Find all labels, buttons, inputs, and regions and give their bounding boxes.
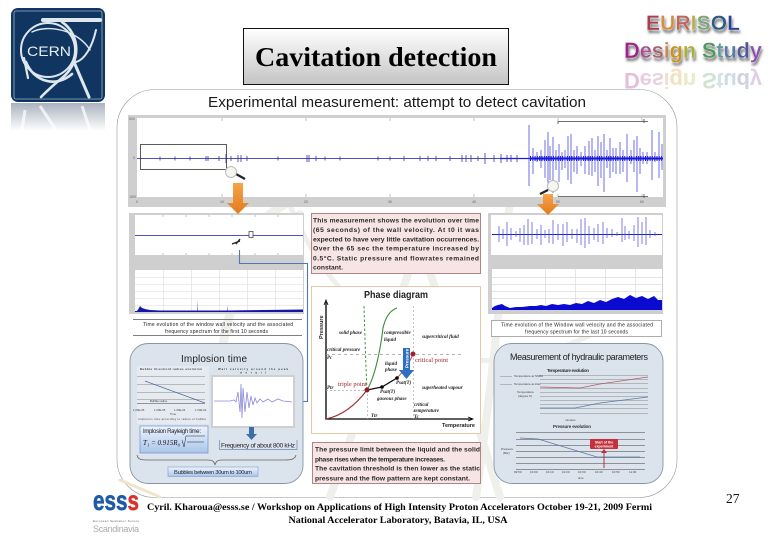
text box: measurement description: expected to have very little cavitation occurrences. [313, 236, 479, 244]
temperature chart: (degree K) [518, 394, 532, 398]
hydraulic heading: Measurement of hydraulic parameters [510, 352, 648, 362]
phase diagram curves [324, 300, 473, 421]
chart: full 65 second wall velocity: 20 [304, 200, 308, 204]
phase diagram labels: Ptr [327, 386, 333, 391]
footer citation: Cyril. Kharoua@esss.se / Workshop on Applications of High Intensity Proton Accelerators October 19-21, 2009 Fermi [147, 502, 652, 513]
implosion pressure chart: Bubble radius [150, 399, 168, 403]
Rayleigh formula box [140, 426, 208, 453]
chart: full 65 second wall velocity: 30 [388, 200, 392, 204]
slide heading: Experimental measurement: attempt to detect cavitation [208, 95, 586, 111]
brace [137, 455, 296, 465]
pressure chart: Pressure evolution [553, 424, 591, 429]
EURISOL Design Study logo: Design Study [624, 68, 763, 93]
implosion waveform: Wall velocity around the peak [218, 367, 288, 371]
phase diagram labels: phase [384, 368, 398, 373]
phase diagram labels: critical point [415, 357, 448, 364]
pressure chart: 10:30 [578, 470, 586, 474]
phase diagram labels: triple point [338, 381, 367, 388]
phase diagram labels: liquid [385, 362, 397, 367]
phase diagram labels [319, 315, 475, 429]
title [244, 28, 508, 84]
chart: full 65 second wall velocity: 500 [129, 117, 135, 121]
panel: implosion time [130, 344, 303, 484]
text box: measurement description: constant. [313, 264, 343, 272]
chart: full 65 second wall velocity [128, 115, 666, 207]
pressure drop arrow: Pressure drop [404, 337, 410, 368]
phase diagram labels: Ttr [371, 414, 377, 419]
phase diagram labels: gaseous phase [376, 397, 407, 402]
text box: pressure limit [312, 442, 480, 484]
implosion pressure chart: 1.00E-05 [133, 408, 145, 412]
chart: full 65 second wall velocity: 50 [556, 200, 560, 204]
temperature chart: Temperature [517, 390, 534, 394]
bubble size label [168, 467, 258, 476]
phase diagram labels: critical [414, 403, 429, 408]
implosion pressure chart: 1.00E-05 [154, 408, 166, 412]
chart: first 10 seconds [129, 213, 304, 314]
panel: phase diagram [312, 286, 480, 434]
caption: first 10 seconds [133, 320, 302, 336]
phase diagram labels: critical pressure [327, 348, 361, 353]
experiment start marker: experiment [595, 444, 614, 448]
implosion pressure chart: 1.00E-04 [174, 408, 186, 412]
pressure chart: Pressure [501, 447, 513, 451]
EURISOL Design Study logo: Design Study [625, 41, 764, 66]
experiment start marker [590, 439, 618, 468]
ESS logo: esss [93, 485, 139, 516]
footer citation [147, 502, 652, 526]
text box: measurement description: This measurement shows the evolution over time [313, 218, 479, 224]
ESS logo: European Spallation Source [93, 519, 139, 523]
phase diagram labels: Psat(T) [380, 390, 396, 395]
implosion pressure chart: Implosion time according to radius of bubble [138, 417, 206, 421]
phase diagram labels: superheated vapour [421, 386, 463, 391]
temperature chart: Temperature at SSBA [514, 374, 543, 378]
arrow: frequency [246, 427, 257, 440]
EURISOL Design Study logo [624, 12, 764, 93]
text box: measurement description [312, 214, 480, 274]
EURISOL Design Study logo: EURISOL [646, 12, 740, 35]
EURISOL Design Study logo: EURISOL [647, 15, 741, 38]
pressure chart: time [578, 476, 584, 480]
text box: pressure limit: phase rises when the temperature increases. [315, 456, 445, 464]
chart: full 65 second wall velocity: 10 [220, 200, 224, 204]
pressure chart: 10:50 [612, 470, 620, 474]
icon: magnifier left [226, 166, 245, 179]
main slide panel [117, 90, 677, 498]
text box: measurement description: (65 seconds) of the wall velocity. At t0 it was [313, 227, 479, 234]
temperature chart: Temperature at inlet [514, 382, 541, 386]
phase diagram labels: temperature [414, 409, 440, 414]
implosion waveform: detail [240, 370, 266, 374]
chart: full 65 second wall velocity: 40 [472, 200, 476, 204]
icon: magnifier right [540, 180, 558, 194]
experiment start marker: Start of the [595, 440, 613, 444]
caption: last 10 seconds [492, 320, 662, 336]
phase diagram labels: solid phase [338, 331, 363, 336]
connector from first chart to implosion panel [240, 250, 308, 404]
Rayleigh formula box: Implosion Rayleigh time: [143, 429, 201, 435]
text box: measurement description: Over the 65 sec the temperature increased by [313, 246, 479, 252]
CERN logo [11, 8, 105, 102]
implosion pressure chart: Bubble threshold radius evolution [140, 367, 202, 371]
pressure chart: 10:20 [562, 470, 570, 474]
caption: last 10 seconds: Time evolution of the Window wall velocity and the associated [501, 322, 653, 328]
bubble size label: Bubbles between 30um to 100um [174, 470, 252, 476]
frequency label: Frequency of about 800 kHz [221, 442, 295, 450]
caption: first 10 seconds: frequency spectrum for the first 10 seconds [165, 329, 268, 335]
implosion pressure chart: 1.00E-03 [195, 408, 207, 412]
EURISOL Design Study logo: Design Study [624, 38, 763, 63]
phase diagram labels: supercritical fluid [421, 335, 459, 340]
temperature chart [500, 368, 648, 422]
pressure chart: 10:00 [530, 470, 538, 474]
temperature chart: minutes [565, 418, 576, 422]
CERN logo reflection [11, 103, 105, 131]
ESS logo [93, 485, 139, 534]
phase diagram heading: Phase diagram [364, 290, 428, 301]
phase diagram labels: Temperature [442, 423, 475, 429]
page number: 27 [726, 491, 740, 506]
footer citation: National Accelerator Laboratory, Batavia, IL, USA [288, 515, 508, 526]
temperature chart: Temperature evolution [547, 368, 589, 373]
pressure chart: 10:10 [546, 470, 554, 474]
text box: pressure limit: The cavitation threshold is then lower as the static [315, 466, 480, 472]
text box: pressure limit: pressure and the flow pattern are kept constant. [315, 476, 470, 482]
title: Cavitation detection [255, 42, 497, 72]
Rayleigh formula box: T₁ = 0.915R₀ · [143, 439, 184, 447]
CERN logo: CERN [27, 43, 71, 59]
implosion heading: Implosion time [181, 354, 247, 365]
pressure drop arrow [399, 337, 414, 379]
panel: hydraulic parameters [494, 344, 663, 484]
ESS logo: Scandinavia [93, 524, 139, 534]
pressure chart: 11:00 [629, 470, 637, 474]
text box: pressure limit: The pressure limit between the liquid and the solid [315, 446, 480, 454]
implosion pressure chart [133, 366, 209, 424]
watermark logo [120, 177, 600, 497]
phase diagram labels: Tc [414, 415, 420, 420]
chart: full 65 second wall velocity: 0 [136, 200, 138, 204]
arrow: right orange [537, 194, 559, 215]
arrow: left orange [227, 183, 249, 214]
caption: first 10 seconds: Time evolution of the window wall velocity and the associated [143, 322, 293, 328]
caption: last 10 seconds: frequency spectrum for the last 10 seconds [525, 330, 628, 336]
pressure chart: (Bar) [503, 451, 510, 455]
phase diagram labels: liquid [384, 338, 396, 343]
phase diagram labels: Pc [327, 356, 333, 361]
pressure chart [501, 424, 645, 480]
text box: measurement description: 0.5°C. Static pressure and flowrates remained [313, 254, 479, 262]
chart: full 65 second wall velocity: -500 [129, 195, 136, 199]
chart: last 10 seconds [488, 213, 663, 314]
chart: full 65 second wall velocity: 0 [133, 156, 135, 160]
implosion pressure chart: Time [170, 412, 177, 416]
pressure chart: 10:40 [595, 470, 603, 474]
phase diagram labels: Psat(T) [396, 381, 412, 386]
phase diagram labels: Pressure [319, 315, 325, 339]
chart: full 65 second wall velocity: 60 [640, 200, 644, 204]
implosion waveform [212, 367, 294, 427]
phase diagram labels: compressible [384, 331, 411, 336]
pressure chart: 09:50 [514, 470, 522, 474]
